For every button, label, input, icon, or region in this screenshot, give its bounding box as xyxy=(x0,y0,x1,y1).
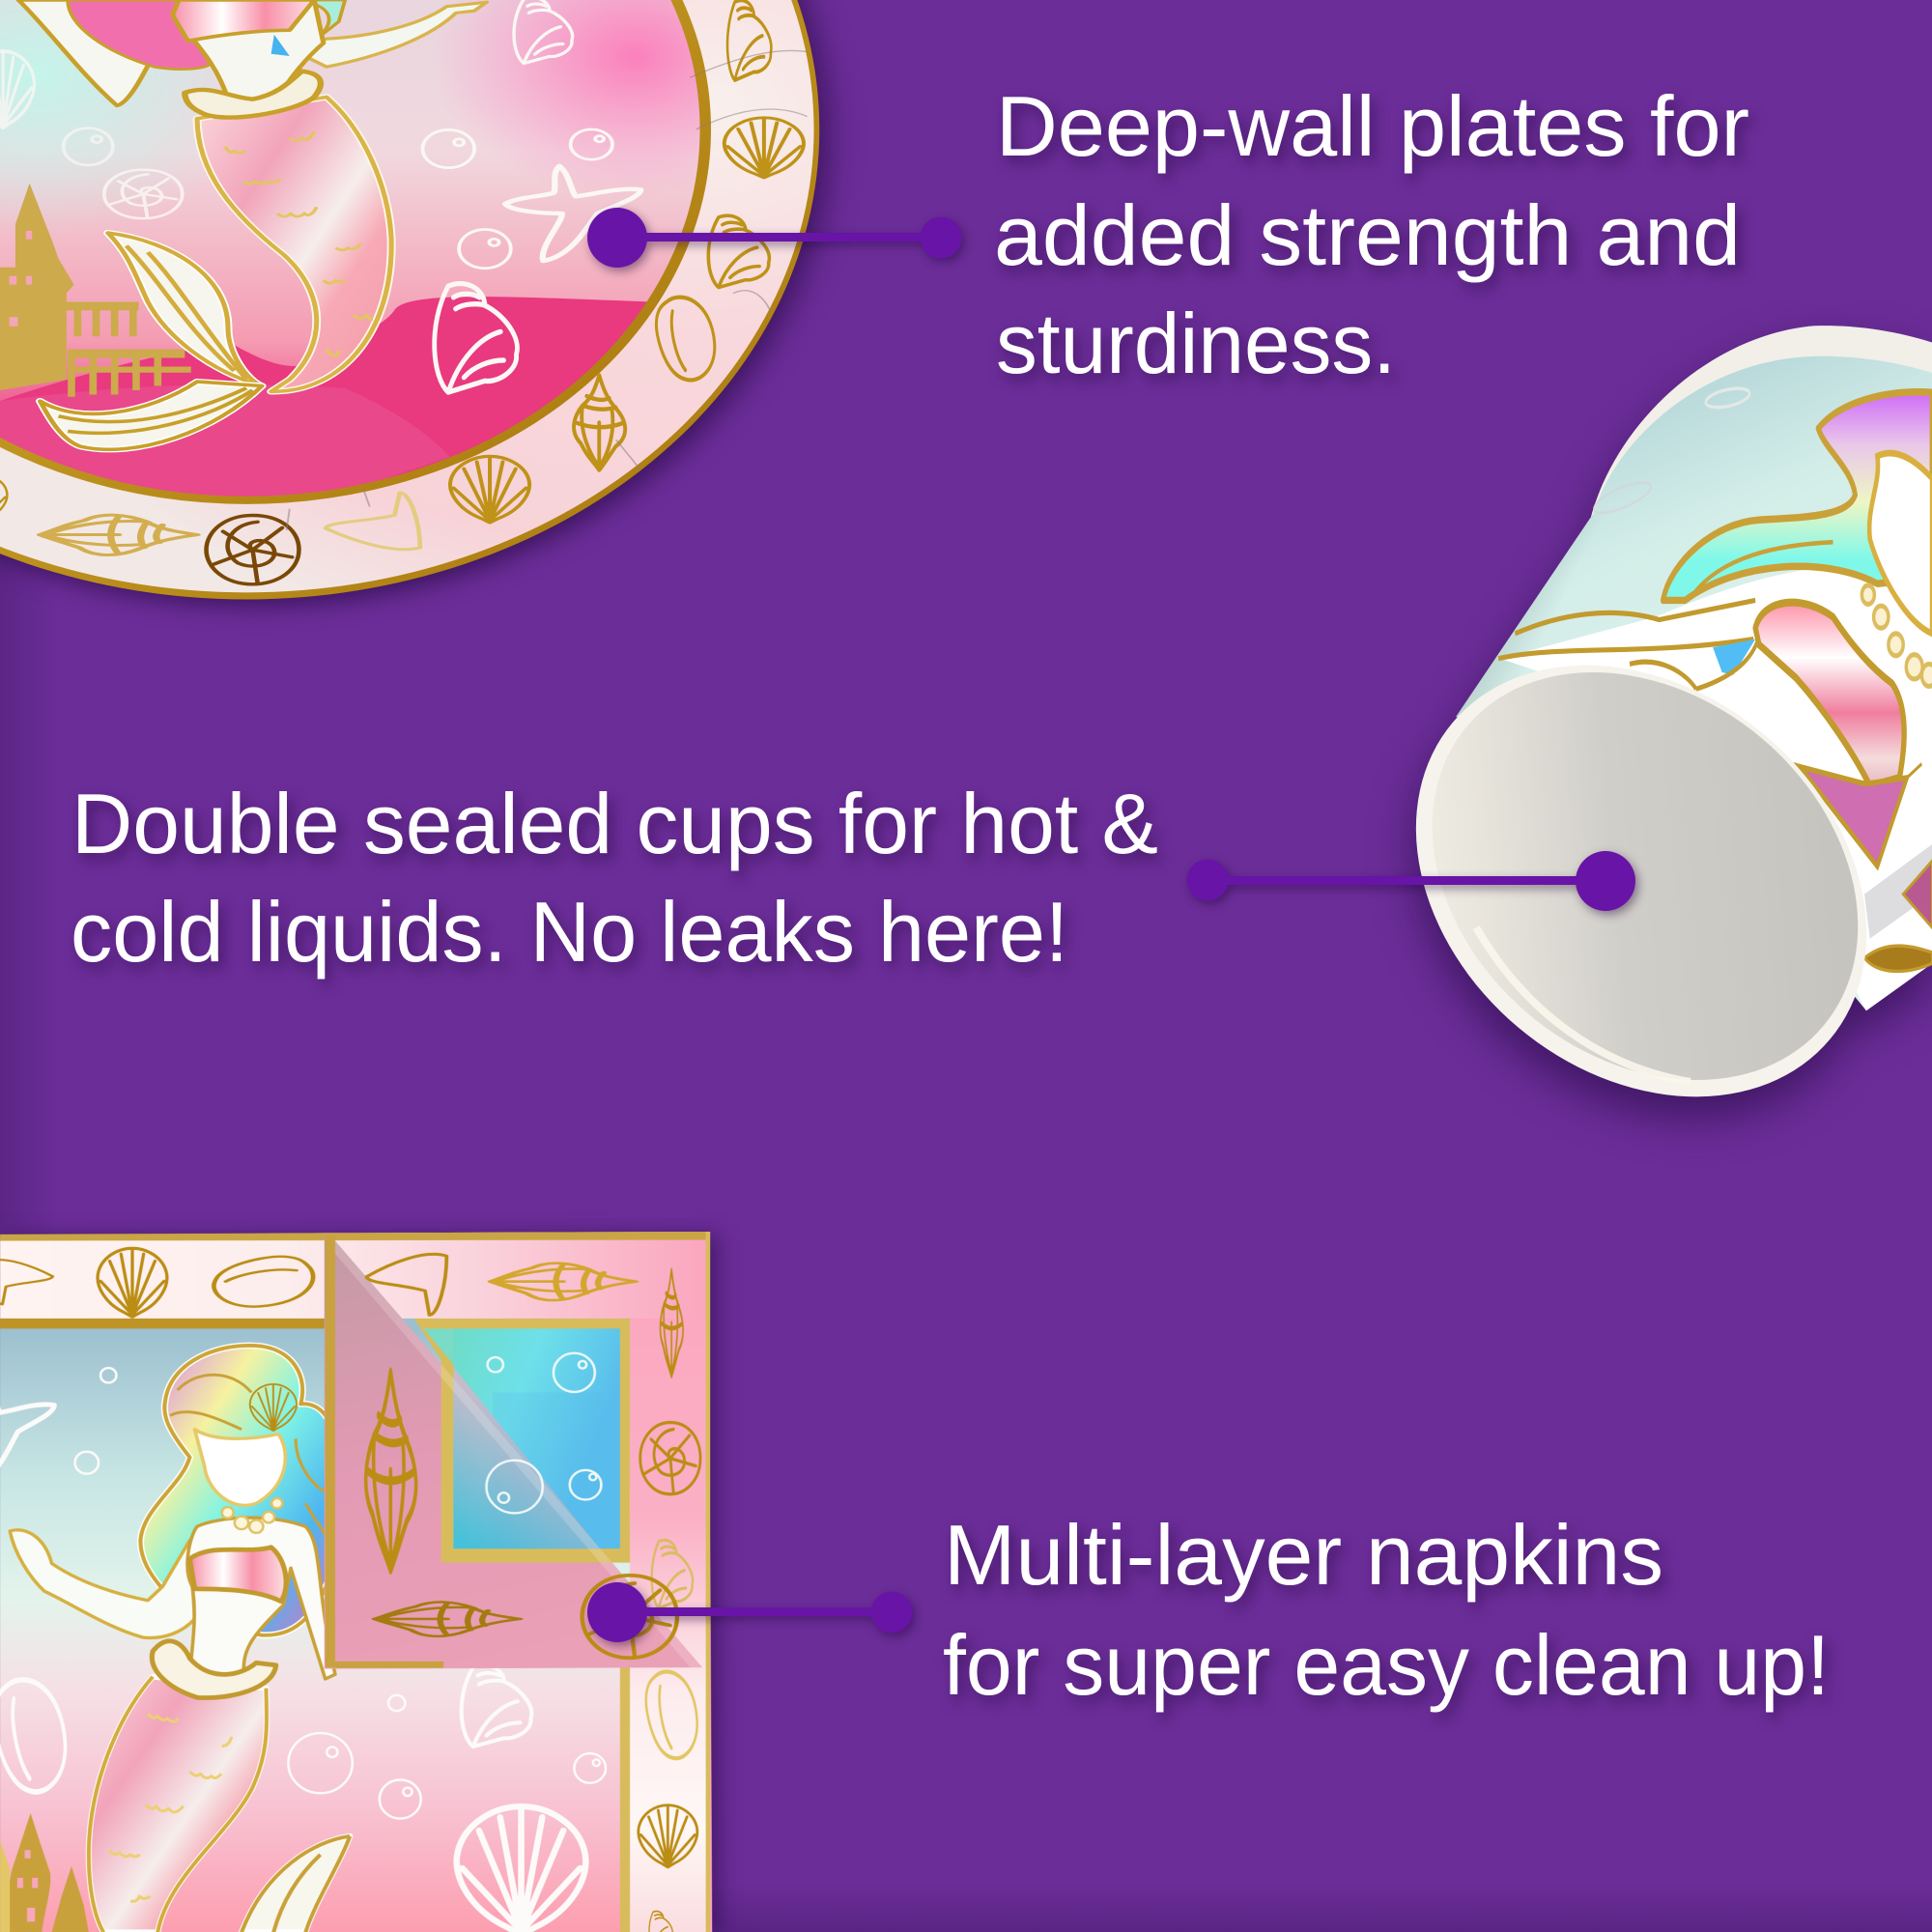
plate white shell outlines xyxy=(0,0,640,392)
cup base inner xyxy=(1350,588,1932,1164)
connector: cup xyxy=(1186,851,1635,911)
torso xyxy=(187,1518,335,1679)
cup bodice xyxy=(1755,603,1904,786)
plate white bubbles and shells xyxy=(64,128,612,269)
window bubbles xyxy=(487,1353,601,1513)
left arm xyxy=(10,1530,195,1637)
cup base outer xyxy=(1329,576,1932,1186)
text: plates xyxy=(994,78,1749,391)
connector dot small xyxy=(1186,860,1229,900)
belt xyxy=(152,1641,276,1698)
tail fin lower xyxy=(40,382,262,449)
panel: paper cup xyxy=(1329,326,1932,1186)
cup blue accent xyxy=(1713,639,1755,675)
tail fin xyxy=(242,1836,350,1932)
napkin castle xyxy=(0,1813,89,1932)
tail scale marks xyxy=(225,131,373,355)
mermaid on plate xyxy=(18,0,487,449)
napkin blue window xyxy=(414,1319,630,1562)
connector dot large xyxy=(587,1582,647,1642)
text: cups: cold liquids. No leaks here! xyxy=(71,884,1068,980)
text: plates: added strength and xyxy=(994,187,1741,283)
cup faint bubbles xyxy=(1705,385,1750,411)
cup skirt xyxy=(1800,767,1907,867)
napkin top gold edge xyxy=(0,1232,709,1240)
connector: napkin xyxy=(587,1582,912,1642)
connector dot large xyxy=(587,208,647,268)
napkin flap diagonal highlight xyxy=(335,1240,702,1667)
napkin base xyxy=(0,1232,712,1932)
hair strip xyxy=(296,0,345,41)
connector line xyxy=(617,233,941,242)
text: napkins: for super easy clean up! xyxy=(943,1617,1830,1713)
connector line xyxy=(1208,876,1605,885)
connector dot large xyxy=(1576,851,1635,911)
plate rim gold shells xyxy=(0,0,804,584)
flap gold frame xyxy=(326,1236,443,1668)
tail xyxy=(197,97,391,391)
cup rim xyxy=(1591,326,1932,517)
napkin main panel xyxy=(0,1319,630,1932)
plate inner gold ring xyxy=(0,0,705,500)
connector: plate xyxy=(587,208,962,268)
cup body xyxy=(1456,326,1932,1010)
hair xyxy=(140,1346,335,1635)
necklace xyxy=(222,1498,282,1533)
cup necklace xyxy=(1861,585,1932,686)
plate centre artwork xyxy=(0,0,739,518)
tail xyxy=(89,1677,267,1932)
belt xyxy=(185,71,321,118)
connector dot small xyxy=(871,1592,912,1633)
panel: napkin xyxy=(0,1232,712,1932)
napkin gold shells xyxy=(0,1248,700,1932)
cup face xyxy=(1869,453,1932,634)
cup arm lines xyxy=(1498,600,1755,659)
plate rim xyxy=(0,0,814,592)
napkin bubbles xyxy=(75,1368,606,1819)
plate rim creases xyxy=(287,50,808,530)
tail fin upper xyxy=(108,233,262,386)
text: napkins: Multi-layer napkins xyxy=(944,1507,1663,1603)
connector line xyxy=(617,1607,892,1616)
text: napkins xyxy=(943,1507,1830,1713)
cup base highlight ridge xyxy=(1476,927,1690,1082)
napkin scallop on hair xyxy=(250,1384,297,1431)
cup hair xyxy=(1662,392,1932,600)
napkin mermaid xyxy=(10,1346,350,1932)
cup wall xyxy=(1456,356,1932,1010)
castle xyxy=(0,184,191,397)
plate gold edge xyxy=(0,0,819,599)
panel: paper plate xyxy=(0,0,819,599)
text: cups xyxy=(71,776,1158,980)
arms xyxy=(18,0,179,105)
face xyxy=(195,1430,285,1505)
napkin right border xyxy=(630,1319,709,1932)
text: plates: sturdiness. xyxy=(996,296,1396,391)
text: cups: Double sealed cups for hot & xyxy=(71,776,1158,871)
connector dot small xyxy=(920,216,962,259)
napkin flap xyxy=(325,1236,702,1669)
napkin white shells xyxy=(0,1378,585,1932)
bodice xyxy=(189,1548,286,1602)
text: plates: Deep-wall plates for xyxy=(996,78,1749,174)
torso xyxy=(176,0,324,99)
cup white lower wall xyxy=(1500,566,1932,1010)
